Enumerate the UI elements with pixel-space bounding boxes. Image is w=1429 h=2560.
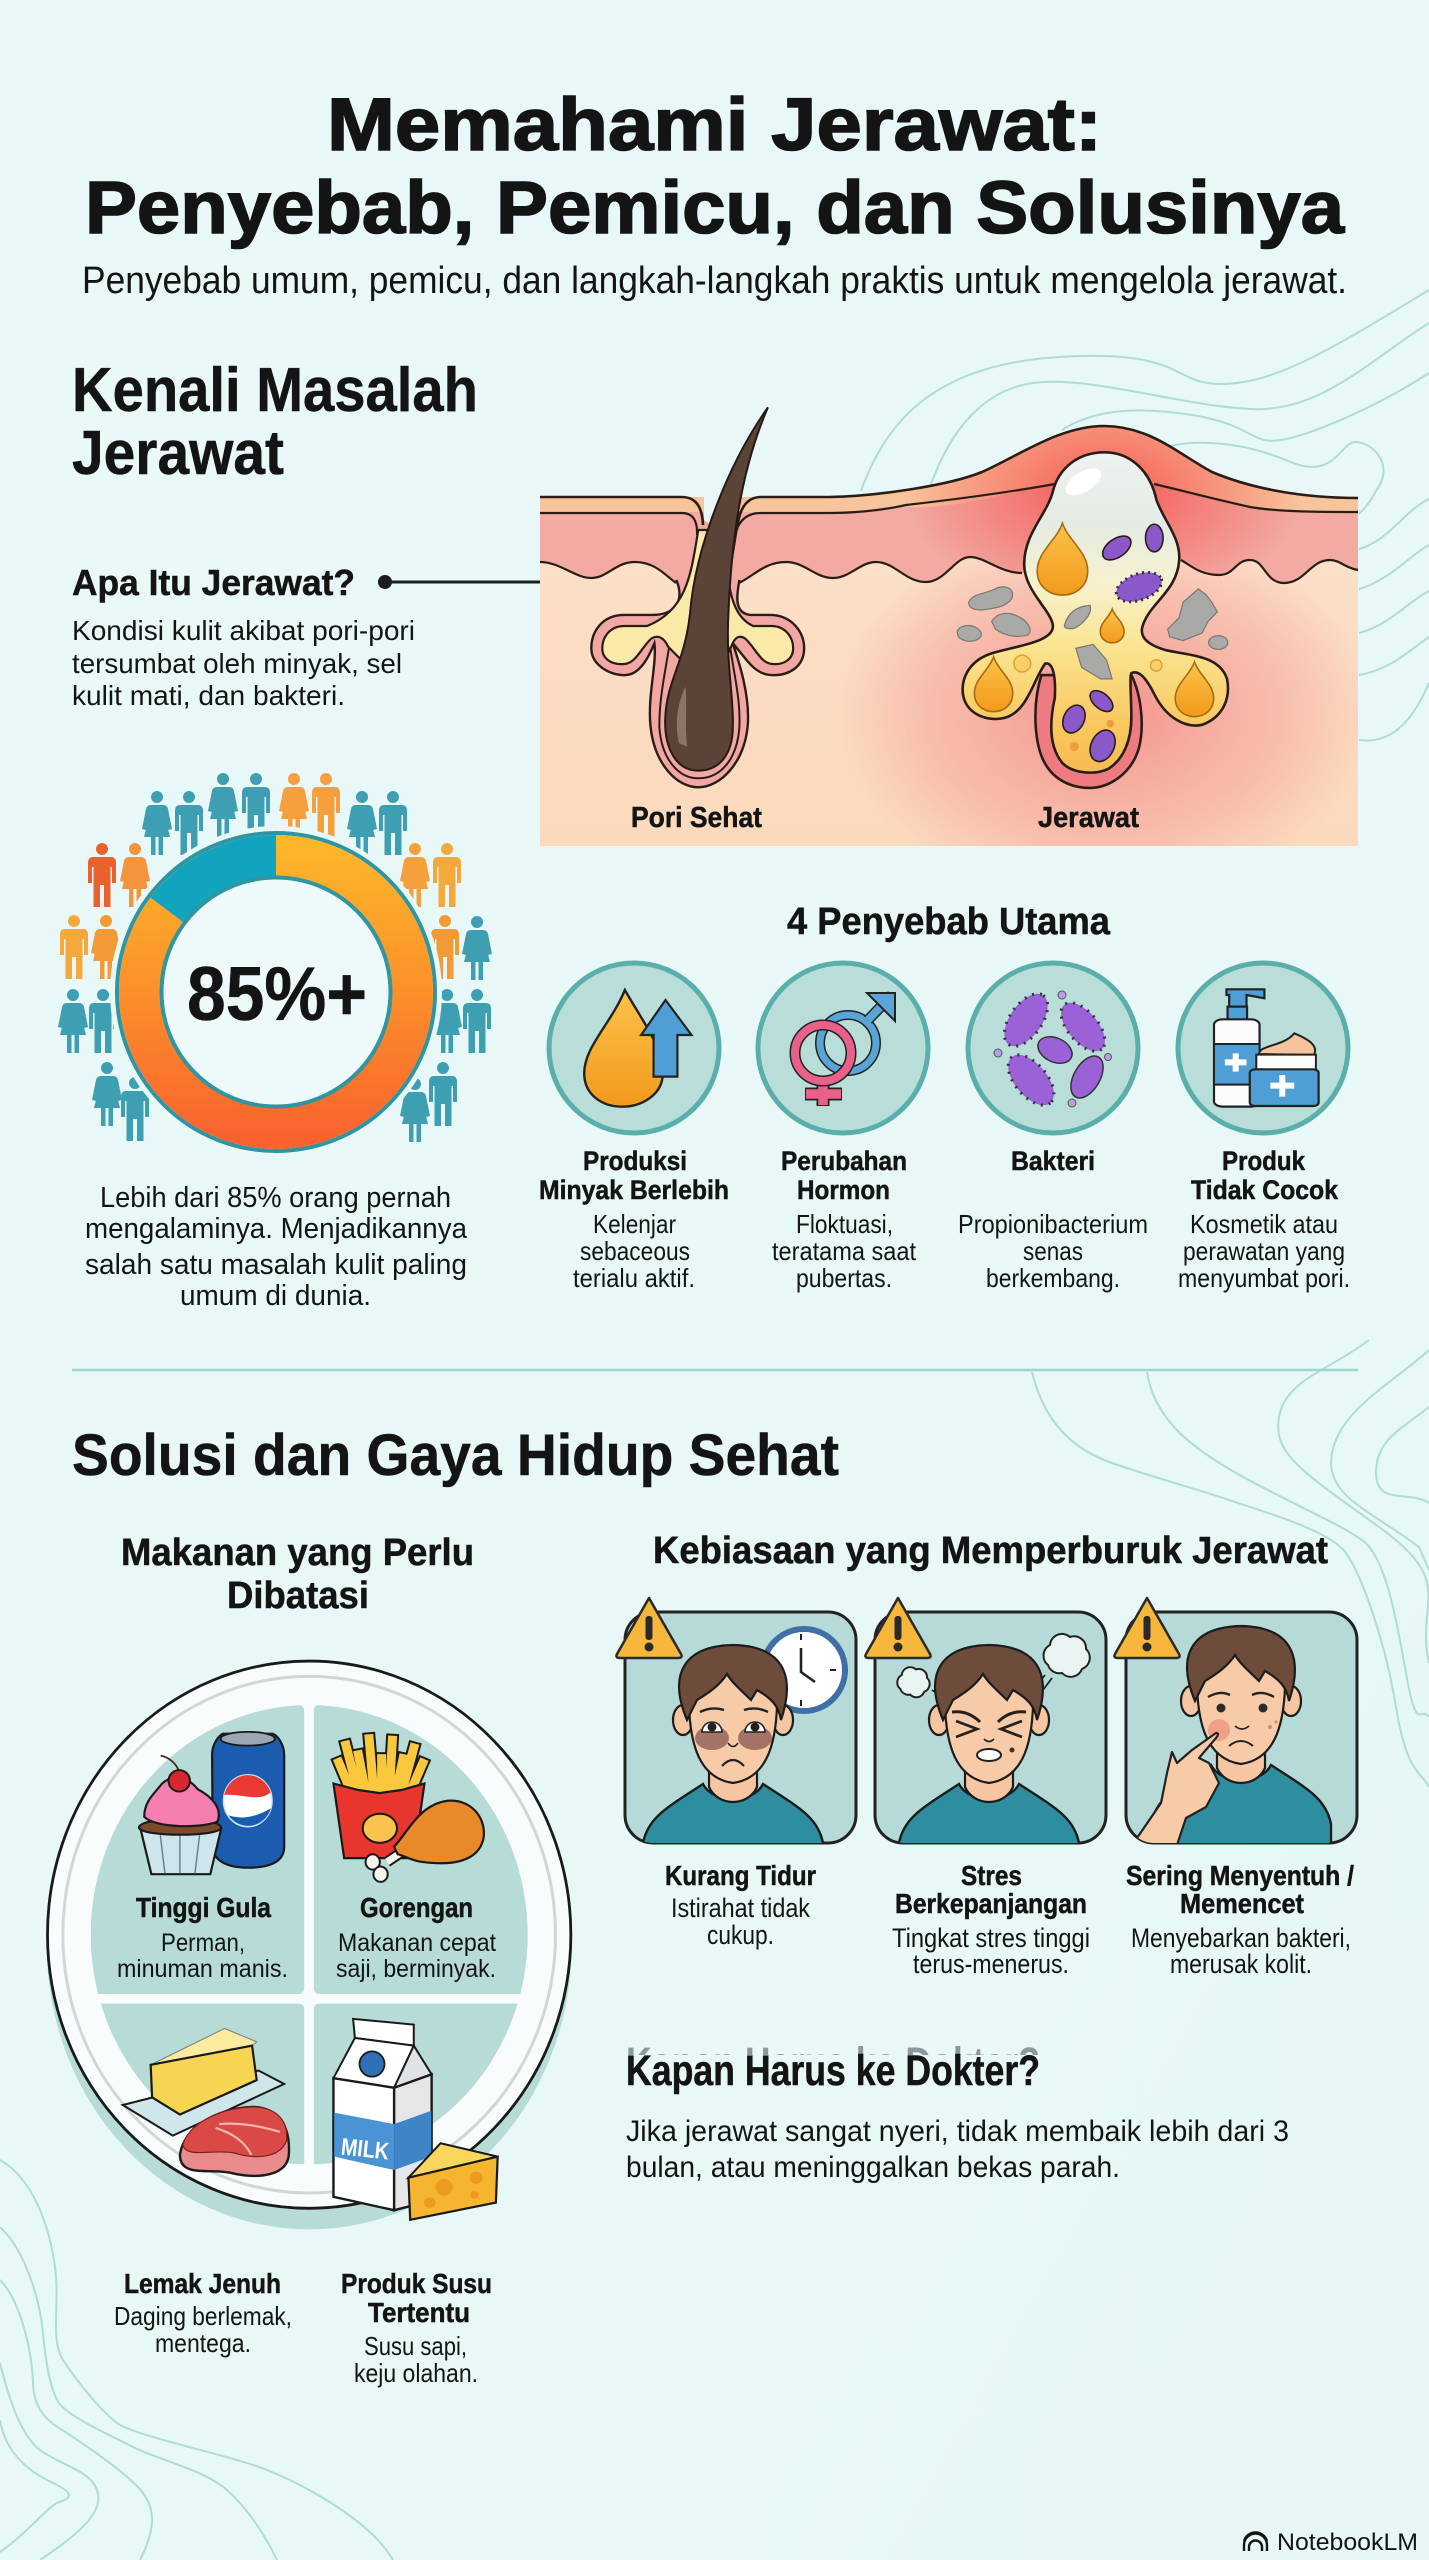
donut chart with people (58, 773, 492, 1158)
connector line (378, 575, 541, 589)
illustration: healthy pore (591, 407, 804, 787)
text: Produk Susu Tertentu: Tertentu (368, 2297, 470, 2328)
text: Stres Berkepanjangan: Berkepanjangan (895, 1888, 1087, 1919)
label: Pori Sehat: Pori Sehat (631, 802, 762, 834)
cause: unsuitable products: Kosmetik atau (1190, 1209, 1338, 1239)
title (85, 83, 1345, 249)
text: Lemak Jenuh: mentega. (155, 2328, 251, 2358)
cause: oil production: sebaceous (580, 1236, 690, 1266)
label: Jerawat: Jerawat (1038, 802, 1139, 834)
text: Lemak Jenuh: Daging berlemak, (114, 2301, 292, 2331)
illustration: face with finger (1130, 1626, 1331, 1855)
text: Tinggi Gula: Perman, (161, 1929, 245, 1957)
cause: hormones: pubertas. (796, 1263, 892, 1293)
heading: Makanan yang Perlu Dibatasi: Makanan yang Perlu (121, 1532, 474, 1574)
cause: hormones: Floktuasi, (796, 1209, 893, 1239)
text block: statistic description: salah satu masalah kulit paling (85, 1249, 467, 1281)
heading: 4 Penyebab Utama: 4 Penyebab Utama (787, 901, 1111, 943)
text block: Kapan Harus ke Dokter (626, 2039, 1289, 2184)
text: Stres Berkepanjangan: Stres (961, 1860, 1022, 1891)
text block: statistic description: umum di dunia. (180, 1280, 371, 1312)
illustration: clogged pore with pimple (957, 452, 1228, 788)
subtitle: Penyebab umum, pemicu, dan langkah-langkah praktis untuk mengelola jerawat. (82, 260, 1347, 302)
text: Stres Berkepanjangan: terus-menerus. (913, 1949, 1069, 1979)
text: Kurang Tidur: cukup. (707, 1920, 774, 1950)
icon: oil drop with arrow (584, 990, 692, 1107)
icon: butter and steak (123, 2028, 289, 2176)
text: Produk Susu Tertentu: Susu sapi, (364, 2331, 467, 2361)
icon: bacteria (994, 986, 1113, 1113)
cause: unsuitable products: Produk (1222, 1146, 1306, 1176)
heading: Kenali Masalah Jerawat: Jerawat (72, 419, 284, 488)
cause: hormones (758, 963, 928, 1293)
text: Produk Susu Tertentu (341, 2268, 492, 2388)
heading: Kebiasaan yang Memperburuk Jerawat: Kebiasaan yang Memperburuk Jerawat (653, 1530, 1328, 1572)
text block: Apa Itu Jerawat: Apa Itu Jerawat? (72, 562, 355, 603)
text: Lemak Jenuh (114, 2268, 292, 2358)
heading: Makanan yang Perlu Dibatasi: Dibatasi (227, 1575, 369, 1617)
stat: 85%+: 85%+ (187, 952, 367, 1037)
cause: oil production: Kelenjar (593, 1209, 676, 1239)
habit card: lack of sleep (616, 1598, 856, 1950)
text: Tinggi Gula: minuman manis. (117, 1955, 288, 1983)
cause: hormones: teratama saat (772, 1236, 917, 1266)
cause: hormones: Hormon (797, 1175, 890, 1205)
text: Produk Susu Tertentu: keju olahan. (354, 2358, 478, 2388)
text: Gorengan (336, 1892, 496, 1983)
heading: Kenali Masalah Jerawat (72, 356, 478, 488)
text: Produk Susu Tertentu: Produk Susu (341, 2268, 492, 2299)
icon: steam clouds (897, 1634, 1090, 1698)
text block: statistic description: mengalaminya. Menjadikannya (85, 1213, 468, 1245)
text block: Kapan Harus ke Dokter: Kapan Harus ke Dokter? (626, 2039, 1040, 2087)
cause: bacteria (958, 963, 1148, 1293)
text: Gorengan: Gorengan (360, 1892, 473, 1923)
text block: Apa Itu Jerawat: tersumbat oleh minyak, sel (72, 648, 402, 679)
cause: unsuitable products (1178, 963, 1350, 1293)
text: Sering Menyentuh: Menyebarkan bakteri, (1131, 1923, 1351, 1953)
cause: oil production (539, 963, 729, 1293)
icon: warning sign (1114, 1598, 1180, 1658)
cause: bacteria: Bakteri (1011, 1146, 1095, 1176)
heading: Kenali Masalah Jerawat: Kenali Masalah (72, 356, 478, 425)
text block: Kapan Harus ke Dokter: Jika jerawat sangat nyeri, tidak membaik lebih dari 3 (626, 2115, 1289, 2148)
text block: Apa Itu Jerawat (72, 562, 415, 711)
cause: bacteria: senas (1023, 1236, 1083, 1266)
diagram: skin cross-section (540, 406, 1358, 846)
label: MILK: MILK (340, 2134, 391, 2165)
text: Sering Menyentuh: Memencet (1180, 1888, 1304, 1919)
cause: bacteria: Propionibacterium (958, 1209, 1148, 1239)
heading: Makanan yang Perlu Dibatasi (121, 1532, 474, 1617)
title: Penyebab, Pemicu, dan Solusinya (85, 166, 1345, 249)
icon: fries and chicken (333, 1739, 484, 1882)
icon: clock (763, 1629, 845, 1711)
text block: Apa Itu Jerawat: Kondisi kulit akibat pori-pori (72, 615, 415, 646)
text: Lemak Jenuh: Lemak Jenuh (124, 2268, 281, 2299)
icon: gender symbols (795, 993, 895, 1106)
text: Kurang Tidur (665, 1860, 816, 1950)
heading: Solusi dan Gaya Hidup Sehat: Solusi dan Gaya Hidup Sehat (72, 1423, 839, 1488)
text: Tinggi Gula: Tinggi Gula (136, 1892, 271, 1923)
text: Sering Menyentuh: merusak kolit. (1170, 1949, 1312, 1979)
text: Sering Menyentuh (1126, 1860, 1354, 1979)
icon: warning sign (616, 1598, 682, 1658)
plate base (47, 1661, 572, 2229)
text block: Kapan Harus ke Dokter: bulan, atau meninggalkan bekas parah. (626, 2151, 1120, 2184)
text block: statistic description (85, 1182, 468, 1312)
text: Tinggi Gula (117, 1892, 288, 1983)
plate of foods (47, 1661, 572, 2229)
title: Memahami Jerawat: (327, 83, 1102, 166)
text block: statistic description: Lebih dari 85% orang pernah (100, 1182, 451, 1214)
text block: Kapan Harus ke Dokter: Kapan Harus ke Dokter? (626, 2047, 1040, 2095)
cause: unsuitable products: menyumbat pori. (1178, 1263, 1350, 1293)
text: Stres Berkepanjangan: Tingkat stres tinggi (892, 1923, 1090, 1953)
cause: hormones: Perubahan (781, 1146, 907, 1176)
logo: NotebookLM: NotebookLM (1277, 2529, 1418, 2556)
text: Sering Menyentuh: Sering Menyentuh / (1126, 1860, 1354, 1891)
text: Kurang Tidur: Kurang Tidur (665, 1860, 816, 1891)
cause: unsuitable products: Tidak Cocok (1191, 1175, 1339, 1205)
icon: bottle and jar (1214, 989, 1319, 1107)
text: Kurang Tidur: Istirahat tidak (671, 1893, 810, 1923)
icon: cupcake and soda can (139, 1732, 284, 1874)
habit card: touching face (1114, 1598, 1357, 1979)
habit card: prolonged stress (865, 1598, 1106, 1979)
icon: people ring (58, 773, 492, 1158)
illustration: stressed face (898, 1644, 1080, 1843)
cause: bacteria: berkembang. (986, 1263, 1120, 1293)
text: Gorengan: Makanan cepat (338, 1929, 496, 1957)
cause: unsuitable products: perawatan yang (1183, 1236, 1345, 1266)
illustration: tired face (642, 1644, 824, 1843)
icon: milk carton and cheese (333, 2019, 498, 2220)
text: Stres Berkepanjangan (892, 1860, 1090, 1979)
donut ring (117, 833, 435, 1151)
cause: oil production: Produksi (583, 1146, 687, 1176)
icon: warning sign (865, 1598, 931, 1658)
cause: oil production: terialu aktif. (573, 1263, 695, 1293)
text block: Apa Itu Jerawat: kulit mati, dan bakteri. (72, 680, 345, 711)
text: Gorengan: saji, berminyak. (336, 1955, 496, 1983)
cause: oil production: Minyak Berlebih (539, 1175, 729, 1205)
